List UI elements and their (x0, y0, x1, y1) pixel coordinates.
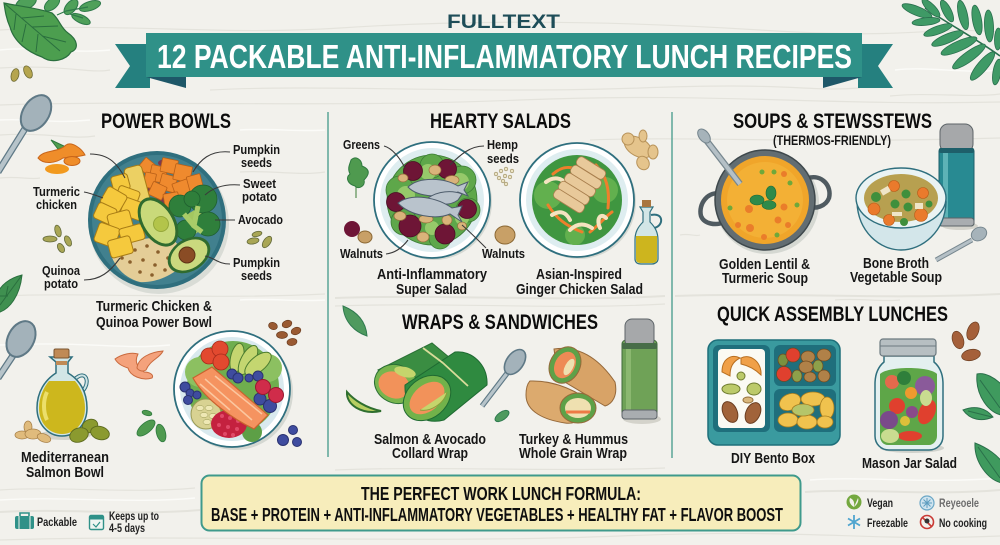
soup vegetables (735, 171, 791, 240)
icon: recycle (920, 496, 934, 510)
label: quinoa potato: Quinoa (42, 263, 81, 278)
chart: mediterranean salmon bowl (174, 331, 293, 450)
heading: wraps and sandwiches: WRAPS & SANDWICHES (402, 311, 598, 334)
greens (386, 154, 480, 249)
caption: asian-inspired ginger chicken salad: Asian-Inspired (536, 266, 622, 283)
caption: turkey and hummus whole grain wrap: Turkey & Hummus (519, 431, 628, 448)
caption: diy bento box: DIY Bento Box (731, 450, 816, 467)
tomatoes (201, 341, 229, 370)
legend: diet icons (846, 494, 987, 530)
walnuts (394, 165, 466, 242)
label: walnuts left: Walnuts (340, 246, 383, 261)
panel: quick assembly lunches (708, 303, 982, 472)
chart: salmon and avocado collard wrap (368, 343, 487, 430)
decoration: left leaf (0, 275, 22, 313)
caption: anti-inflammatory super salad (377, 266, 488, 298)
jar salad layers (880, 368, 937, 445)
icon: turmeric root (38, 140, 85, 174)
caption: mediterranean salmon bowl: Salmon Bowl (26, 464, 104, 481)
icon: calendar (90, 516, 104, 530)
chart: golden lentil and turmeric soup (695, 127, 830, 254)
caption: mediterranean salmon bowl: Mediterranean (21, 449, 109, 466)
avocado halves (129, 190, 217, 281)
icon: seeds left (43, 224, 73, 254)
icon: spoon (482, 346, 530, 406)
icon: hemp seeds (494, 167, 514, 186)
decoration: spoon lower left (0, 316, 41, 378)
caption: anti-inflammatory super salad: Super Salad (396, 281, 467, 298)
label: hemp seeds: Hemp (487, 137, 518, 152)
label: sweet potato (242, 176, 277, 204)
leader lines (84, 152, 240, 280)
label: pumpkin seeds lower (233, 255, 280, 283)
pomegranate (211, 410, 247, 438)
chart: asian-inspired ginger chicken salad (520, 143, 636, 259)
label: keeps up to 4-5 days: Keeps up to (109, 509, 159, 523)
leader lines (384, 146, 486, 254)
icon: almonds (950, 320, 982, 362)
label: pumpkin seeds: Pumpkin (233, 142, 280, 157)
icon: freezable (848, 515, 860, 529)
chart: mason jar salad (875, 339, 944, 453)
icon: blueberries (278, 426, 302, 446)
label: packable: Packable (37, 515, 77, 529)
panel: formula callout (202, 476, 800, 530)
caption: salmon and avocado collard wrap: Collard Wrap (392, 445, 468, 462)
title ribbon (115, 33, 893, 88)
label: greens: Greens (343, 137, 380, 152)
label: walnuts right: Walnuts (482, 246, 525, 261)
decoration: pumpkin seeds top left (10, 65, 34, 82)
caption: asian-inspired ginger chicken salad: Ginger Chicken Salad (516, 281, 643, 298)
broccoli (169, 185, 220, 240)
label: vegan: Vegan (867, 496, 893, 510)
label: pumpkin seeds: seeds (241, 155, 272, 170)
heading: soups and stews: SOUPS & STEWSSTEWS (733, 110, 932, 133)
caption: bone broth vegetable soup (850, 255, 942, 286)
label: sweet potato: potato (242, 189, 277, 204)
heading: hearty salads: HEARTY SALADS (430, 110, 571, 133)
icon: beet and walnut (344, 221, 372, 243)
bento fruit (777, 390, 834, 429)
quinoa (110, 238, 184, 282)
bento vegetables (776, 348, 831, 382)
panel: soups and stews (695, 110, 989, 287)
formula text: BASE + PROTEIN + ANTI-INFLAMMATORY VEGETABLES + HEALTHY FAT + FLAVOR BOOST (211, 505, 783, 525)
caption: bone broth vegetable soup: Bone Broth (863, 255, 929, 272)
label: pumpkin seeds lower: Pumpkin (233, 255, 280, 270)
salmon fillet (193, 367, 268, 429)
subheading: thermos-friendly: (THERMOS-FRIENDLY) (773, 132, 891, 148)
caption: salmon and avocado collard wrap (374, 431, 486, 462)
icon: olive oil bottle (37, 349, 91, 440)
caption: turkey and hummus whole grain wrap: Whole Grain Wrap (519, 445, 627, 462)
label: turmeric chicken: Turmeric (33, 184, 80, 199)
caption: turmeric chicken and quinoa power bowl (96, 298, 212, 331)
chart: anti-inflammatory super salad (374, 142, 492, 260)
decoration: spoon upper left (0, 90, 58, 172)
chart: bone broth vegetable soup (856, 168, 946, 250)
label: turmeric chicken: chicken (36, 197, 77, 212)
ladle (695, 127, 740, 184)
beets (386, 160, 476, 244)
caption: turmeric chicken and quinoa power bowl: Quinoa Power Bowl (96, 314, 212, 331)
icon: almonds (268, 319, 302, 346)
icon: salmon slices (115, 351, 163, 379)
grain patch (191, 399, 221, 429)
label: avocado: Avocado (238, 212, 283, 227)
formula heading: THE PERFECT WORK LUNCH FORMULA: (361, 484, 641, 504)
panel: wraps and sandwiches (343, 306, 661, 462)
icon: small leaves (134, 409, 168, 443)
label: reyeoele: Reyeoele (939, 496, 979, 510)
orange strips and noodles (546, 165, 612, 232)
caption: mediterranean salmon bowl (21, 449, 109, 481)
caption: anti-inflammatory super salad: Anti-Inflammatory (377, 266, 488, 283)
label: quinoa potato (42, 263, 81, 291)
icon: avocado wedge (347, 392, 381, 412)
label: quinoa potato: potato (44, 276, 78, 291)
icon: suitcase (15, 513, 34, 529)
icon: spoon (936, 224, 989, 260)
blueberries (180, 369, 276, 412)
label: sweet potato: Sweet (243, 176, 277, 191)
decoration: right leaves (963, 374, 1000, 483)
decoration: top-right fern (900, 0, 1000, 85)
chart: turkey and hummus wrap (526, 341, 616, 423)
label: pumpkin seeds lower: seeds (241, 268, 272, 283)
caption: golden lentil and turmeric soup: Turmeric Soup (722, 270, 808, 287)
icon: seeds right (247, 230, 274, 249)
label: hemp seeds: seeds (487, 151, 519, 166)
decoration: top-left leaves (4, 0, 102, 61)
label: hemp seeds (487, 137, 519, 166)
caption: salmon and avocado collard wrap: Salmon & Avocado (374, 431, 486, 448)
icon: green thermos (622, 319, 661, 424)
bento rice toppings (719, 357, 764, 426)
caption: turmeric chicken and quinoa power bowl: Turmeric Chicken & (96, 298, 212, 315)
icon: no cooking (920, 516, 934, 528)
chart: diy bento box (708, 340, 840, 445)
caption: golden lentil and turmeric soup (719, 256, 810, 287)
icon: vegan (846, 494, 862, 510)
section dividers (328, 112, 672, 458)
heading: power bowls: POWER BOWLS (101, 110, 231, 133)
title kicker: FULLTEXT (447, 11, 560, 33)
label: keeps up to 4-5 days: 4-5 days (109, 521, 145, 535)
icon: olives (68, 417, 111, 445)
caption: turkey and hummus whole grain wrap (519, 431, 628, 462)
chart: turmeric chicken and quinoa power bowl (84, 151, 240, 294)
icon: walnut (495, 226, 515, 244)
caption: golden lentil and turmeric soup: Golden Lentil & (719, 256, 810, 273)
icon: teal thermos (939, 124, 978, 230)
icon: small leaf (493, 408, 511, 424)
icon: arugula leaf (348, 158, 368, 198)
label: pumpkin seeds (233, 142, 280, 170)
turmeric chicken (93, 164, 151, 259)
panel: power bowls (15, 110, 302, 481)
decoration: leaf (343, 306, 367, 336)
chicken slices (552, 155, 607, 214)
legend: packable and keeps (15, 509, 159, 535)
icon: olive oil cruet (635, 200, 661, 264)
parsley (750, 186, 776, 210)
sardines (398, 179, 468, 222)
label: freezable: Freezable (867, 516, 908, 530)
icon: ginger (15, 421, 52, 444)
sweet potato (138, 157, 204, 208)
icon: ginger (621, 130, 658, 172)
caption: bone broth vegetable soup: Vegetable Soup (850, 269, 942, 286)
label: turmeric chicken (33, 184, 80, 212)
caption: mason jar salad: Mason Jar Salad (862, 455, 957, 472)
title: 12 PACKABLE ANTI-INFLAMMATORY LUNCH RECIPES (157, 38, 852, 75)
avocado slices (228, 342, 275, 380)
label: keeps up to 4-5 days (109, 509, 159, 535)
raspberries (256, 380, 284, 402)
panel: hearty salads (340, 110, 661, 298)
caption: asian-inspired ginger chicken salad (516, 266, 643, 298)
